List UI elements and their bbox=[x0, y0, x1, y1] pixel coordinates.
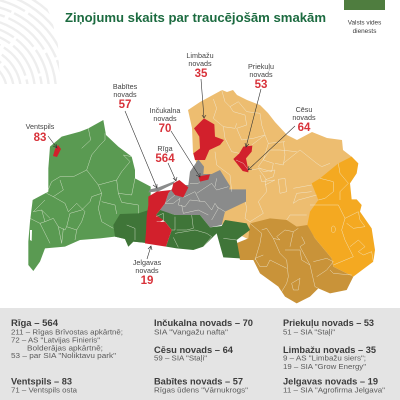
list: Babites: Babītes novads – 57 bbox=[154, 376, 243, 386]
label: Incukalna: novads bbox=[153, 114, 177, 123]
label: Priekulu: 53 bbox=[255, 79, 267, 91]
list: Incukalna bbox=[154, 318, 253, 336]
map of Latvia bbox=[28, 90, 375, 303]
list: Babites bbox=[154, 376, 249, 394]
region: Vidzeme light orange bbox=[188, 90, 352, 240]
label: Cesu bbox=[248, 105, 316, 170]
label: Limbazu: Limbažu bbox=[186, 51, 214, 60]
Limbazu red bbox=[193, 118, 224, 160]
logo: Valsts vides dienests: Valsts vides bbox=[348, 20, 381, 26]
list: Jelgavas bbox=[283, 376, 386, 394]
label: Riga: 564 bbox=[155, 153, 175, 165]
list: Jelgavas: 11 – SIA "Agrofirma Jelgava" bbox=[283, 388, 386, 394]
label: Babites: 57 bbox=[119, 99, 131, 111]
list: Riga: 72 – AS "Latvijas Finieris" bbox=[11, 338, 101, 344]
label: Ventspils: 83 bbox=[34, 132, 46, 144]
background fingerprint pattern bbox=[0, 0, 60, 84]
list: Ventspils: 71 – Ventspils osta bbox=[11, 388, 77, 394]
logo: Valsts vides dienests: dienests bbox=[353, 28, 376, 35]
Priekulu and Cesu red bbox=[233, 146, 252, 172]
Babites and Jelgava red bbox=[145, 190, 172, 247]
label: Babites: novads bbox=[113, 90, 137, 99]
label: Ventspils: Ventspils bbox=[26, 122, 55, 131]
Incukalna red bbox=[198, 174, 210, 182]
list: Riga: 211 – Rīgas Brīvostas apkārtnē; bbox=[11, 330, 123, 336]
label: Limbazu: 35 bbox=[195, 68, 208, 80]
list: Incukalna: Inčukalna novads – 70 bbox=[154, 318, 253, 328]
label: Jelgavas bbox=[133, 246, 162, 287]
label: Babites: Babītes bbox=[113, 82, 138, 91]
label: Priekulu bbox=[245, 62, 274, 147]
label: Priekulu: Priekuļu bbox=[248, 62, 274, 71]
brown bbox=[236, 218, 353, 303]
label: Ventspils bbox=[26, 122, 57, 148]
list: Babites: Rīgas ūdens "Vārnukrogs" bbox=[154, 388, 249, 394]
region: central grey, green, Riga and Babite bbox=[145, 159, 250, 258]
grey bbox=[160, 159, 246, 227]
label: Cesu: novads bbox=[292, 113, 316, 122]
label: Babites bbox=[113, 82, 157, 188]
list: Cesu bbox=[154, 345, 234, 362]
list: Riga: Rīga – 564 bbox=[11, 318, 59, 328]
region: Vidzeme north borders and red bbox=[193, 90, 285, 192]
list: Ventspils: Ventspils – 83 bbox=[11, 376, 72, 386]
bottom panel bbox=[0, 308, 400, 400]
list: Limbazu: 9 – AS "Limbažu siers"; bbox=[283, 356, 366, 362]
list: Riga bbox=[11, 318, 123, 360]
list: Cesu: 59 – SIA "Staļi" bbox=[154, 356, 208, 362]
label: Riga bbox=[155, 144, 177, 181]
list: Priekulu bbox=[283, 318, 374, 336]
list: Jelgavas: Jelgavas novads – 19 bbox=[283, 376, 378, 386]
list: Incukalna: SIA "Vangažu nafta" bbox=[154, 330, 229, 336]
list: Limbazu: 19 – SIA "Grow Energy" bbox=[283, 364, 367, 371]
yellow bbox=[307, 157, 375, 277]
dark green bbox=[156, 210, 250, 258]
title: Ziņojumu skaits par traucējošām smakām bbox=[65, 10, 326, 25]
Ventspils red bbox=[53, 145, 61, 157]
region: Latgale and Sela bbox=[236, 150, 375, 303]
label: Priekulu: novads bbox=[249, 70, 273, 79]
list: Ventspils bbox=[11, 376, 77, 394]
list: Limbazu: Limbažu novads – 35 bbox=[283, 345, 376, 355]
label: Limbazu: novads bbox=[188, 59, 212, 68]
label: Jelgavas: novads bbox=[135, 266, 159, 275]
label: Riga: Rīga bbox=[157, 144, 173, 153]
Riga red bbox=[172, 180, 188, 197]
label: Limbazu bbox=[186, 51, 214, 118]
list: Priekulu: 51 – SIA "Staļi" bbox=[283, 330, 336, 336]
list: Riga: 53 – par SIA "Noliktavu park" bbox=[11, 353, 117, 360]
logo: Valsts vides dienests bbox=[344, 0, 385, 35]
label: Cesu: 64 bbox=[298, 122, 311, 134]
label: Jelgavas: 19 bbox=[141, 275, 153, 287]
label: Incukalna: 70 bbox=[159, 123, 171, 135]
list: Cesu: Cēsu novads – 64 bbox=[154, 345, 234, 355]
list: Limbazu bbox=[283, 345, 376, 371]
label: Incukalna: Inčukalna bbox=[150, 106, 180, 115]
label: Jelgavas: Jelgavas bbox=[133, 258, 162, 267]
list: Priekulu: Priekuļu novads – 53 bbox=[283, 318, 374, 328]
label: Cesu: Cēsu bbox=[296, 105, 312, 114]
region: Kurzeme green bbox=[28, 120, 151, 271]
label: Incukalna bbox=[150, 106, 200, 177]
list: Riga: Bolderājas apkārtnē; bbox=[27, 346, 103, 352]
